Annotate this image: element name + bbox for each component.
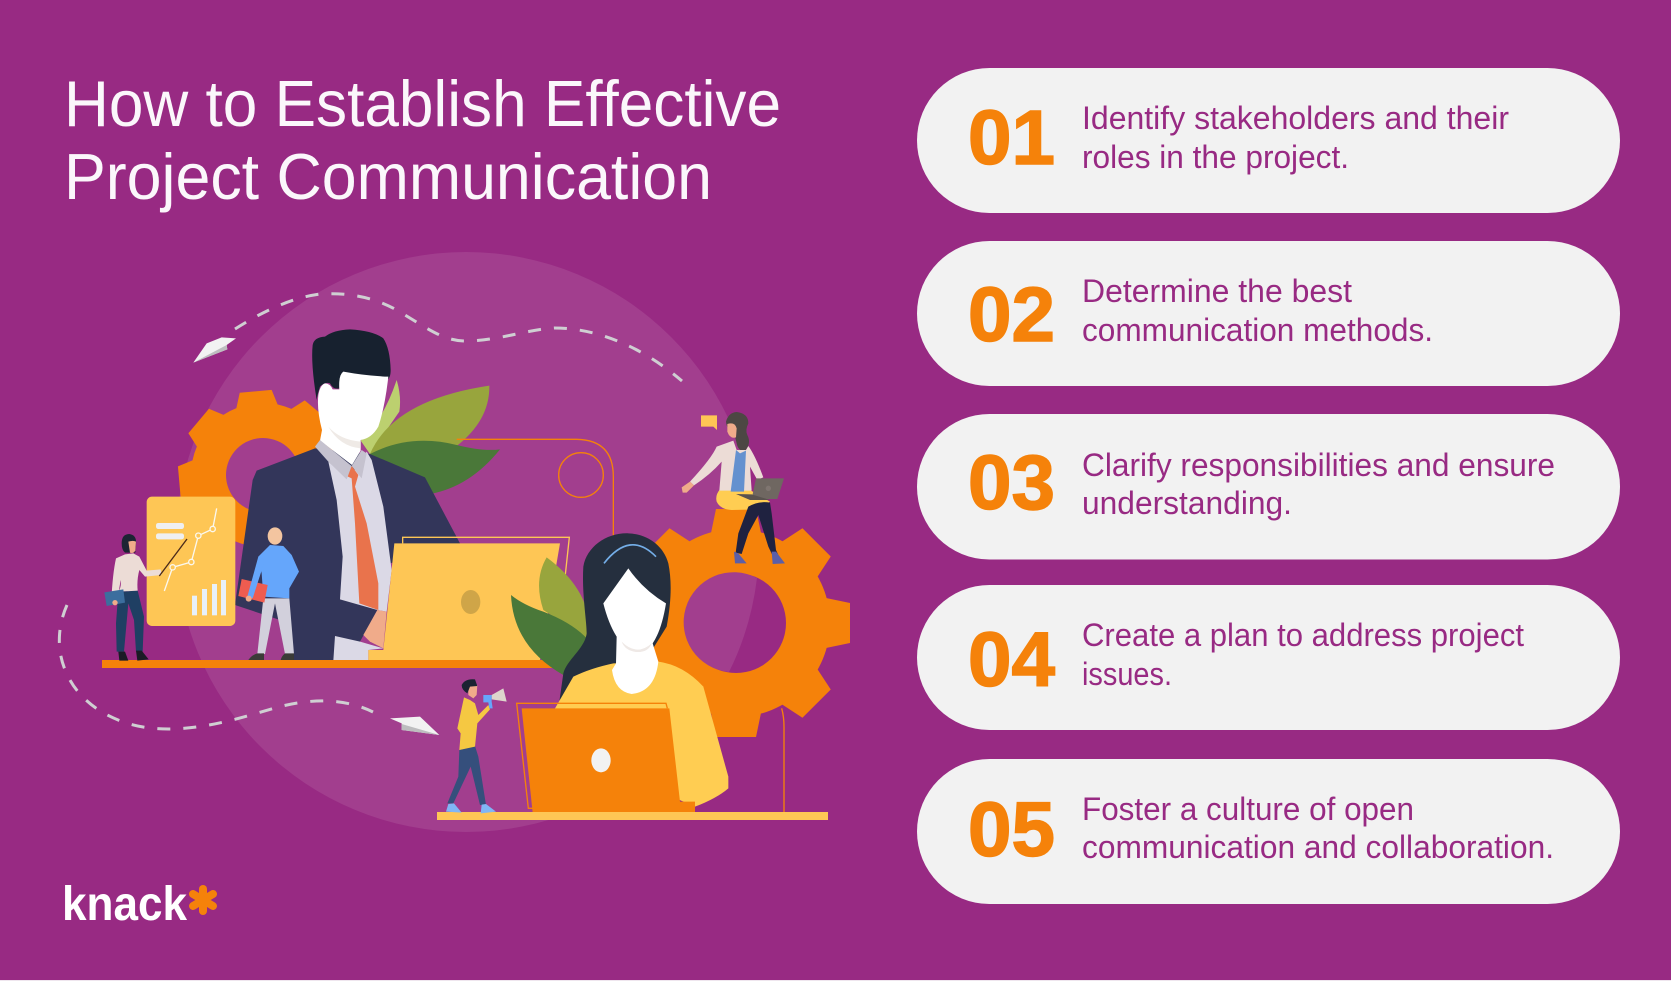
right gear xyxy=(622,509,850,737)
small man with megaphone xyxy=(446,679,507,813)
logo: knack: knack xyxy=(62,878,187,931)
dashed flight path: top xyxy=(235,294,682,381)
leaves beside woman xyxy=(511,557,590,675)
title: How to Establish Effective xyxy=(64,67,781,140)
panel: step 04: 04 xyxy=(968,617,1055,703)
panel: step 05: 05 xyxy=(968,787,1055,873)
panel: step 04: Create a plan to address project xyxy=(1082,617,1524,653)
panel: step 04: issues. xyxy=(1082,656,1172,692)
dashed flight path: bottom xyxy=(59,605,373,729)
small woman with pointer xyxy=(104,534,187,661)
panel: step 03: Clarify responsibilities and ensure xyxy=(1082,447,1555,483)
yellow laptop xyxy=(368,537,569,660)
panel: step 02: Determine the best xyxy=(1082,273,1352,309)
paper plane: top xyxy=(193,337,236,363)
panel: step 05: Foster a culture of open xyxy=(1082,791,1414,827)
panel: step 03: understanding. xyxy=(1082,485,1292,521)
seated woman with laptop xyxy=(682,412,785,564)
panel: step 01 xyxy=(917,68,1620,213)
chart board xyxy=(147,497,235,626)
left gear xyxy=(172,384,354,566)
title: Project Communication xyxy=(64,140,712,213)
leaves behind man xyxy=(361,380,500,494)
man collar xyxy=(315,440,367,479)
title xyxy=(64,67,781,213)
man body xyxy=(235,448,460,661)
orange floor xyxy=(102,660,562,668)
panel: step 02: 02 xyxy=(968,272,1055,358)
panel: step 02 xyxy=(917,241,1620,386)
orange outline: rounded frame and circle xyxy=(457,439,784,813)
small man in blue xyxy=(238,527,299,660)
large man in suit xyxy=(235,329,460,661)
yellow floor xyxy=(437,812,828,820)
illustration: team communicating around gears and laptops xyxy=(59,252,850,832)
paper plane: bottom xyxy=(390,717,439,735)
panel: step 05 xyxy=(917,759,1620,904)
panel: step 03: 03 xyxy=(968,440,1055,526)
background circle xyxy=(176,252,756,832)
man head xyxy=(312,329,391,465)
logo asterisk xyxy=(193,889,213,911)
panel: step 01: roles in the project. xyxy=(1082,139,1349,175)
panel: step 02: communication methods. xyxy=(1082,312,1433,348)
large woman with laptop xyxy=(517,533,728,813)
panel: step 01: Identify stakeholders and their xyxy=(1082,100,1509,136)
panel: step 05: communication and collaboration. xyxy=(1082,829,1554,865)
panel: step 03 xyxy=(917,414,1620,560)
panel: step 04 xyxy=(917,585,1620,730)
panel: step 01: 01 xyxy=(968,95,1055,181)
